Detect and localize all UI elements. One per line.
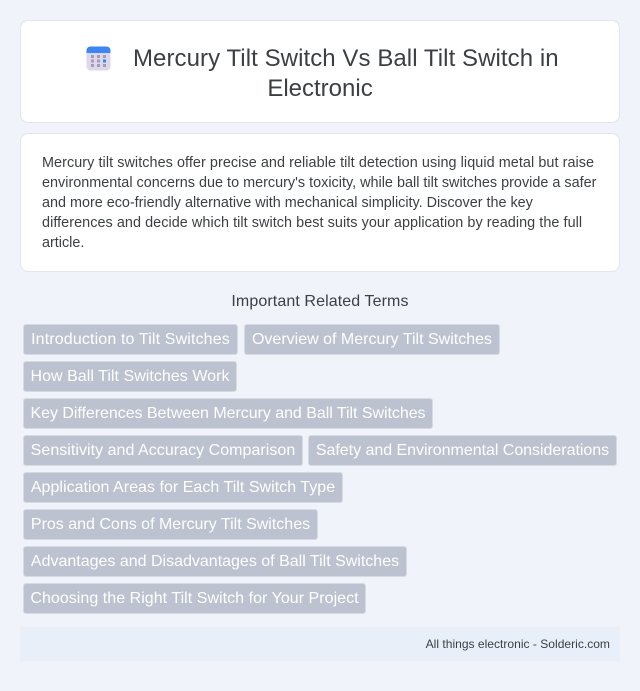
tag bbox=[23, 546, 407, 577]
header panel bbox=[20, 20, 620, 123]
tag bbox=[23, 509, 318, 540]
tag: Application Areas for Each Tilt Switch Type bbox=[31, 479, 335, 496]
summary text: differences and decide which tilt switch best suits your application by reading the full bbox=[42, 215, 582, 231]
tag bbox=[23, 583, 366, 614]
tag bbox=[308, 435, 617, 466]
related terms heading: Important Related Terms bbox=[231, 293, 409, 310]
footer text: All things electronic - Solderic.com bbox=[426, 637, 610, 651]
title: Mercury Tilt Switch Vs Ball Tilt Switch in bbox=[133, 45, 559, 72]
tag: Key Differences Between Mercury and Ball Tilt Switches bbox=[30, 405, 426, 422]
tag: Safety and Environmental Considerations bbox=[316, 442, 609, 459]
title bbox=[133, 45, 559, 102]
tag: Pros and Cons of Mercury Tilt Switches bbox=[31, 516, 310, 533]
summary text: article. bbox=[42, 235, 84, 251]
tag: Overview of Mercury Tilt Switches bbox=[252, 331, 492, 348]
summary text bbox=[42, 155, 596, 251]
tag bbox=[23, 472, 343, 503]
summary text: Mercury tilt switches offer precise and reliable tilt detection using liquid metal but raise bbox=[42, 155, 594, 171]
tag bbox=[23, 361, 237, 392]
title: Electronic bbox=[267, 74, 373, 102]
summary panel bbox=[20, 133, 620, 272]
tag: Advantages and Disadvantages of Ball Tilt Switches bbox=[31, 553, 399, 570]
tag: How Ball Tilt Switches Work bbox=[30, 368, 230, 385]
summary text: and more eco-friendly alternative with mechanical simplicity. Discover the key bbox=[42, 195, 533, 211]
related terms tag list bbox=[23, 324, 617, 614]
summary text: environmental concerns due to mercury's toxicity, while ball tilt switches provide a safer bbox=[42, 175, 596, 191]
tag bbox=[244, 324, 500, 355]
tag bbox=[23, 398, 433, 429]
tag: Sensitivity and Accuracy Comparison bbox=[31, 442, 295, 459]
tag bbox=[23, 324, 238, 355]
tag bbox=[23, 435, 303, 466]
footer bar bbox=[20, 627, 620, 661]
icon: calendar bbox=[86, 46, 110, 70]
tag: Choosing the Right Tilt Switch for Your Project bbox=[30, 590, 359, 607]
tag: Introduction to Tilt Switches bbox=[31, 331, 230, 348]
